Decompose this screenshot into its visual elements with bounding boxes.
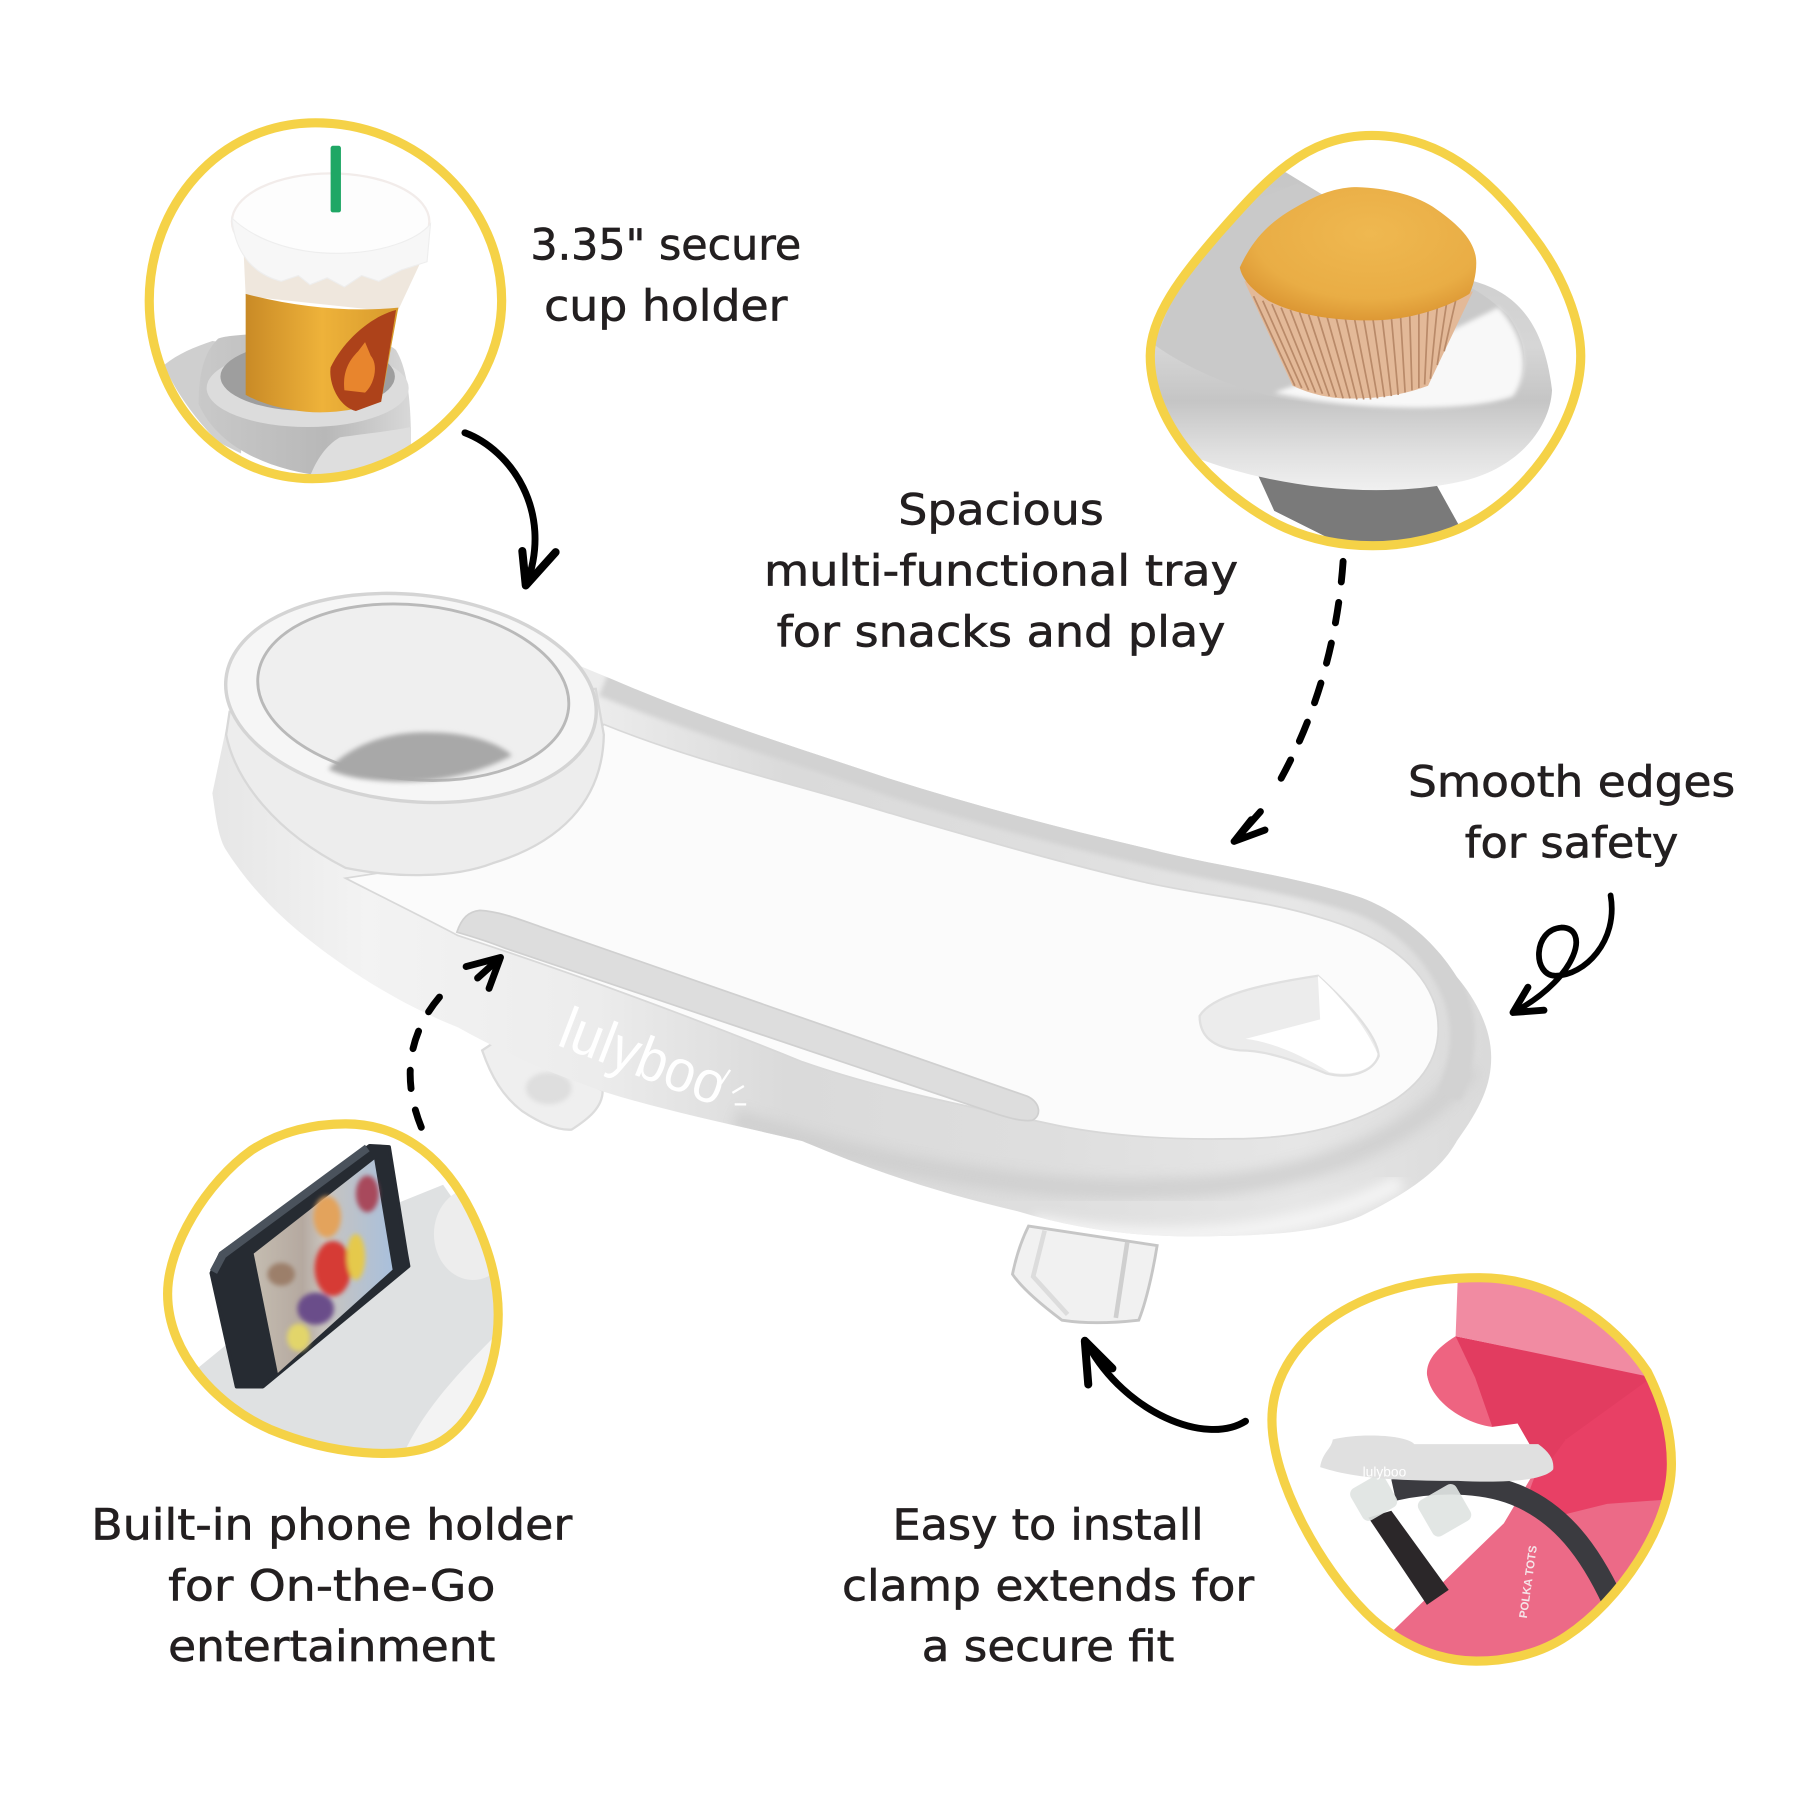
detail: muffin on tray: [1131, 135, 1581, 563]
text: spacious tray: multi-functional tray: [764, 547, 1238, 596]
lid: [230, 172, 430, 253]
stroller photo: [1320, 1282, 1667, 1656]
arrow: cup circle to cup holder: [465, 433, 556, 585]
text: cup holder: [530, 221, 801, 331]
canopy underside: [1427, 1336, 1653, 1469]
ring: [168, 1124, 498, 1453]
text: phone holder: for On-the-Go: [168, 1562, 495, 1611]
text: easy install: a secure fit: [922, 1623, 1174, 1672]
phone photo: [198, 1144, 494, 1449]
tray back rim: [604, 684, 1462, 1096]
cup holder opening: [249, 589, 578, 795]
text: phone holder: entertainment: [168, 1623, 495, 1672]
phone screen: [254, 1159, 393, 1373]
plate surface: [1156, 194, 1524, 362]
brand on fabric: POLKA TOTS: [1518, 1544, 1540, 1619]
mini cup holder: [434, 1194, 489, 1280]
tray front rim: [407, 1340, 492, 1448]
cup holder rim: [215, 576, 607, 820]
muffin photo: [1154, 172, 1552, 542]
shading along front rim: [604, 684, 1469, 1235]
snack holder bump: [1200, 976, 1379, 1075]
canopy top: [1456, 1274, 1665, 1378]
lid skirt: [232, 218, 430, 287]
holder wedge: [311, 427, 411, 474]
text: smooth edges: Smooth edges: [1408, 759, 1735, 808]
cup upper: [244, 256, 420, 311]
muffin top: [1240, 187, 1476, 320]
text: spacious tray: for snacks and play: [777, 608, 1225, 657]
arrow: stroller circle to clamp: [1085, 1341, 1246, 1429]
text: spacious tray: [764, 487, 1238, 657]
tray fragment: [164, 341, 241, 453]
tray body: [212, 597, 1491, 1236]
holder lip: [206, 366, 409, 427]
arrow: smooth edges squiggle: [1513, 895, 1612, 1012]
liquid: [246, 294, 398, 412]
wrapper: [1244, 281, 1473, 399]
straw: [331, 146, 341, 212]
holder: [199, 334, 411, 476]
stroller foam: [1258, 476, 1458, 542]
text: smooth edges: [1408, 759, 1735, 869]
cup holder outer wall: [226, 689, 604, 875]
main product: tray: [212, 576, 1491, 1323]
ring: [1150, 135, 1581, 546]
on-screen figure: [267, 1176, 379, 1351]
right fabric mass: [1530, 1381, 1667, 1514]
clamp left: [1348, 1472, 1400, 1523]
arrow: muffin circle to tray: [1234, 561, 1343, 841]
phone body: [211, 1146, 409, 1387]
badge cat: [344, 342, 375, 393]
strap: [1368, 1511, 1449, 1605]
seat fabric: [1394, 1478, 1662, 1656]
mini logo: lulyboo: [1363, 1464, 1407, 1479]
detail: stroller clamp: [1272, 1274, 1688, 1676]
plate highlight: [1274, 308, 1523, 408]
holder opening: [220, 352, 395, 411]
text: easy install: clamp extends for: [842, 1562, 1255, 1611]
plate: [1131, 172, 1552, 490]
cup photo: [164, 146, 430, 482]
tray surface: [198, 1185, 494, 1449]
mini tray: [1320, 1436, 1553, 1482]
tray floor: [346, 724, 1438, 1139]
text: easy install: Easy to install: [893, 1501, 1204, 1550]
phone side edge: [214, 1148, 367, 1272]
infographic canvas: [95, 118, 1734, 1666]
cup badge: [330, 310, 396, 411]
brand logo on tray: lulyboo: [551, 994, 736, 1118]
cup holder base shadow: [328, 732, 512, 782]
text: phone holder: Built-in phone holder: [91, 1501, 573, 1550]
text: smooth edges: for safety: [1465, 820, 1678, 869]
text: spacious tray: Spacious: [898, 487, 1104, 536]
clamp right: [1415, 1481, 1474, 1539]
wrapper pleats: [1254, 296, 1456, 399]
tray leg right: [1012, 1226, 1157, 1323]
text: phone holder: [91, 1501, 573, 1672]
text: cup holder: 3.35" secure: [530, 221, 801, 270]
arrow: phone circle to slot: [410, 957, 501, 1127]
ring: [1272, 1278, 1671, 1661]
ring: [149, 123, 502, 479]
text: easy install: [842, 1501, 1255, 1672]
phone slot: [457, 910, 1039, 1121]
tray leg left: [482, 1039, 603, 1130]
detail: phone holder: [168, 1124, 512, 1469]
text: cup holder: cup holder: [544, 282, 788, 331]
canopy underside left: [1427, 1336, 1492, 1427]
detail: cup holder: [149, 123, 502, 482]
handle bar: [1394, 1484, 1613, 1601]
